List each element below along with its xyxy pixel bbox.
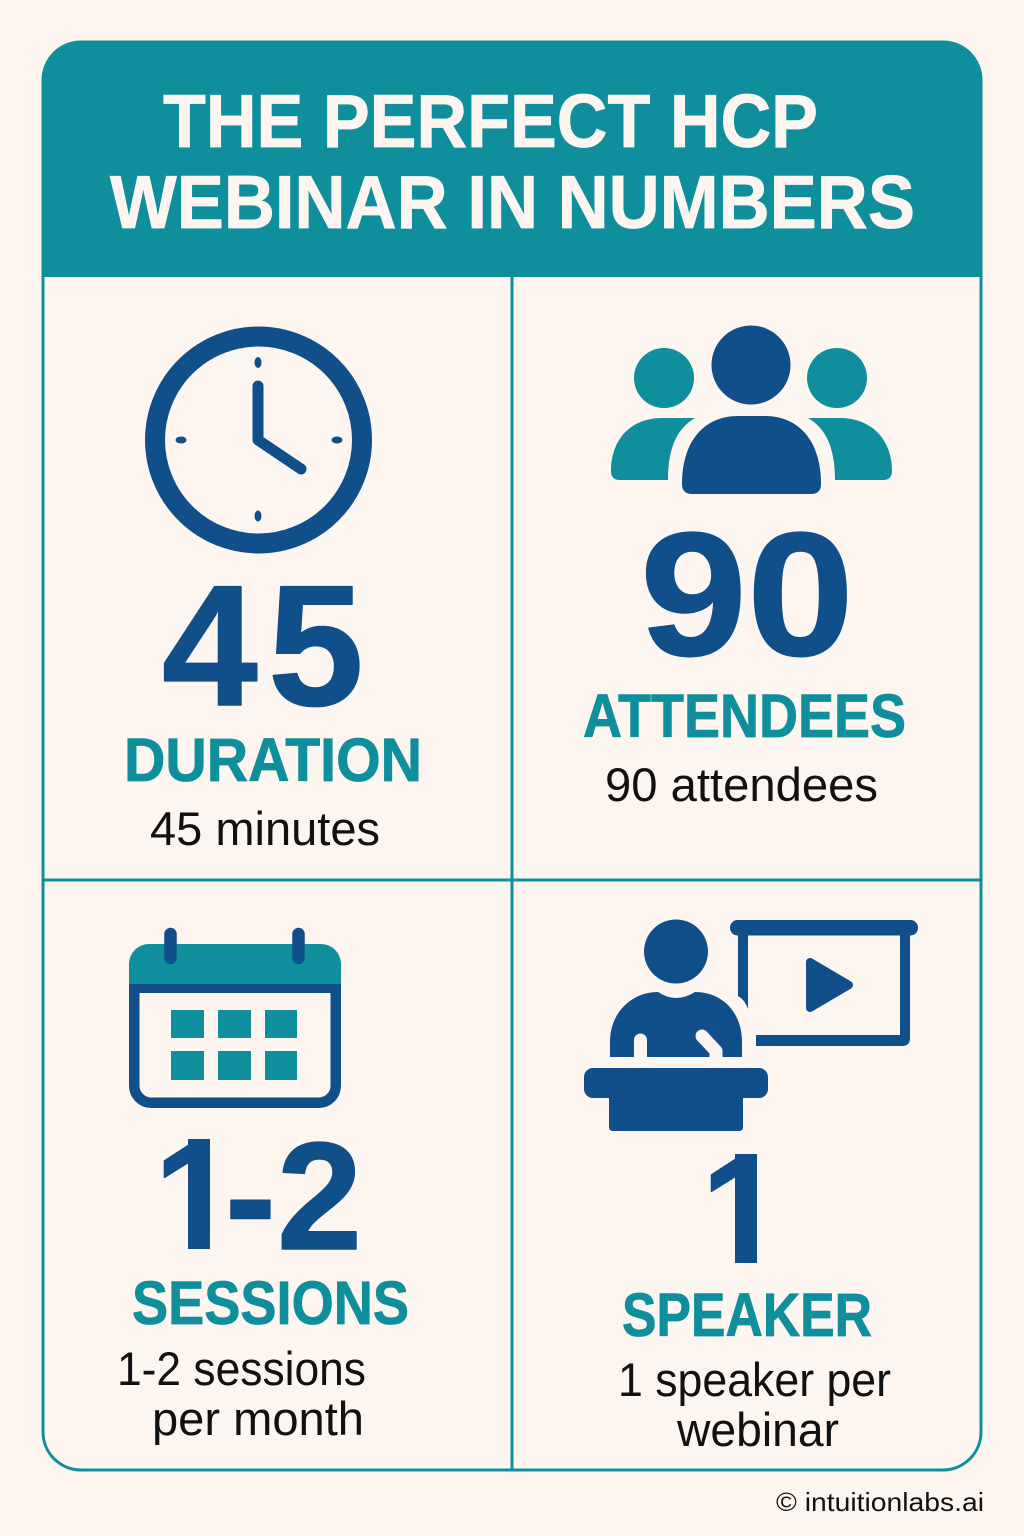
description: sessions per month: 1-2 sessions — [117, 1342, 366, 1395]
title: WEBINAR IN NUMBERS — [110, 160, 915, 244]
number: 1 — [710, 1154, 757, 1263]
panel: sessions — [117, 934, 409, 1445]
description: sessions per month — [117, 1342, 366, 1445]
header band — [42, 41, 982, 277]
label: sessions: SESSIONS — [132, 1269, 409, 1337]
copyright footer: © intuitionlabs.ai — [776, 1487, 984, 1517]
panel: speaker — [584, 920, 918, 1456]
description: sessions per month: per month — [152, 1392, 364, 1445]
description: speaker per webinar — [618, 1353, 891, 1456]
panel: attendees — [583, 326, 906, 811]
number: 1: 1 — [701, 1125, 786, 1296]
label: speaker: SPEAKER — [622, 1281, 872, 1349]
panel: duration — [124, 336, 422, 855]
title: THE PERFECT HCP — [163, 79, 818, 163]
description: speaker per webinar: webinar — [676, 1403, 839, 1456]
label: duration: DURATION — [124, 726, 422, 794]
icon: clock — [155, 336, 362, 544]
icon: calendar — [129, 934, 341, 1103]
number: 1-2 — [164, 1139, 357, 1250]
description: speaker per webinar: 1 speaker per — [618, 1353, 891, 1406]
number: 45: 45 — [162, 550, 364, 742]
description: 90 attendees: 90 attendees — [605, 758, 878, 811]
number: 1-2: 1-2 — [154, 1111, 362, 1282]
label: attendees: ATTENDEES — [583, 682, 906, 750]
icon: group of people — [611, 326, 892, 494]
number: 90: 90 — [640, 497, 854, 693]
icon: presenter with screen — [584, 920, 918, 1131]
title — [110, 79, 915, 244]
description: 45 minutes: 45 minutes — [150, 802, 380, 855]
